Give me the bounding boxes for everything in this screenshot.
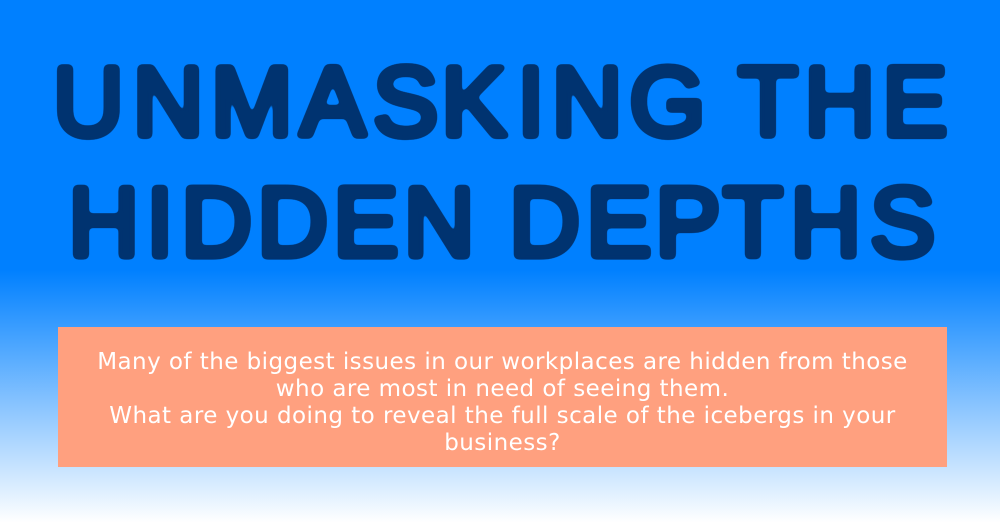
callout text panel: who are most in need of seeing them. — [276, 376, 729, 402]
callout text panel: Many of the biggest issues in our workplaces are hidden from those — [97, 349, 908, 375]
title: UNMASKING THE — [53, 46, 948, 156]
title — [53, 46, 948, 277]
callout text panel — [58, 327, 947, 467]
title: HIDDEN DEPTHS — [68, 167, 935, 277]
callout text panel: What are you doing to reveal the full scale of the icebergs in your — [109, 403, 896, 429]
callout text panel: business? — [444, 430, 561, 456]
